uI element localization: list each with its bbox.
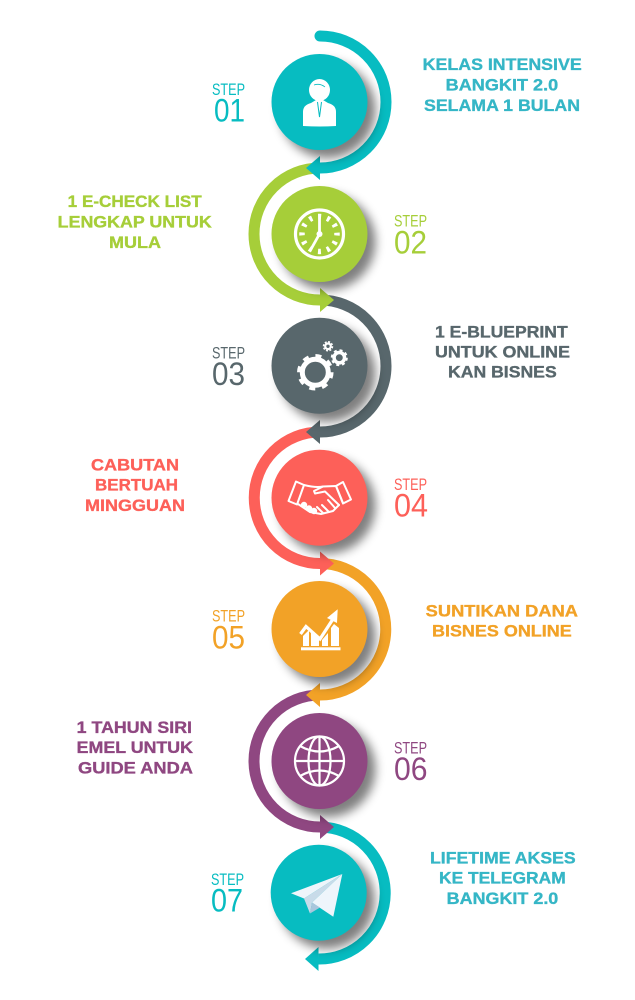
- text: step 3 description: 1 E-BLUEPRINT: [435, 323, 568, 341]
- step label 06: STEP: [394, 739, 427, 757]
- step label 04: 04: [394, 488, 428, 524]
- step label 02: STEP: [394, 213, 427, 231]
- step label 01: STEP: [212, 81, 245, 99]
- icon: globe: [295, 736, 344, 786]
- text: step 1 description: KELAS INTENSIVE: [423, 56, 582, 74]
- text: step 1 description: SELAMA 1 BULAN: [424, 97, 580, 115]
- text: step 2 description: 1 E-CHECK LIST: [68, 193, 202, 211]
- arrow: step 7: [305, 827, 385, 971]
- text: step 4 description: CABUTAN: [91, 457, 179, 475]
- curved arrows connecting the steps: [254, 36, 386, 971]
- text: step 2 description: MULA: [109, 234, 161, 252]
- step label 03: 03: [212, 356, 245, 392]
- text: step 4 description: BERTUAH: [95, 477, 178, 495]
- icon: gears: [299, 342, 347, 389]
- step label 02: 02: [394, 224, 427, 260]
- panel: step 3: [212, 318, 570, 422]
- panel: step 1: [212, 54, 582, 158]
- arrow: step 4: [254, 432, 334, 576]
- text: step 2 description: LENGKAP UNTUK: [58, 214, 212, 232]
- step label 07: 07: [211, 883, 243, 919]
- step label 06: 06: [394, 751, 428, 787]
- text: step 5 description: BISNES ONLINE: [432, 623, 572, 641]
- panel: step 2: [58, 186, 427, 290]
- step label 05: 05: [212, 619, 245, 655]
- text: step 6 description: 1 TAHUN SIRI: [77, 719, 192, 737]
- text: step 7 description: KE TELEGRAM: [439, 870, 566, 888]
- text: step 7 description: LIFETIME AKSES: [430, 850, 576, 868]
- text: step 4 description: [85, 457, 185, 515]
- text: step 7 description: [430, 850, 576, 908]
- step label 04: STEP: [394, 476, 427, 494]
- panel: step 4: [85, 450, 428, 554]
- text: step 2 description: [58, 193, 212, 252]
- text: step 6 description: [77, 719, 193, 778]
- icon: clock: [296, 210, 344, 258]
- icon: growth chart: [300, 609, 340, 650]
- step label 07: STEP: [211, 871, 244, 889]
- text: step 5 description: [426, 603, 578, 641]
- text: step 7 description: BANGKIT 2.0: [447, 890, 558, 908]
- arrow: step 1: [306, 36, 386, 180]
- icon: businessman: [303, 79, 336, 126]
- panel: step 7: [211, 845, 576, 949]
- text: step 3 description: [435, 323, 570, 381]
- arrow: step 6: [254, 695, 334, 839]
- text: step 3 description: UNTUK ONLINE: [435, 343, 570, 361]
- panel: step 5: [212, 581, 578, 685]
- text: step 6 description: GUIDE ANDA: [78, 760, 193, 778]
- icon: handshake: [288, 482, 351, 514]
- text: step 3 description: KAN BISNES: [448, 363, 557, 381]
- step label 03: STEP: [212, 344, 245, 362]
- text: step 1 description: BANGKIT 2.0: [446, 76, 558, 94]
- arrow: step 5: [306, 564, 386, 707]
- text: step 6 description: EMEL UNTUK: [77, 739, 193, 757]
- arrow: step 3: [306, 300, 386, 444]
- arrow: step 2: [254, 168, 334, 312]
- icon: paper plane: [291, 874, 342, 917]
- text: step 1 description: [423, 56, 582, 115]
- step label 05: STEP: [212, 608, 245, 626]
- panel: step 6: [77, 713, 427, 817]
- text: step 4 description: MINGGUAN: [85, 497, 185, 515]
- step label 01: 01: [214, 92, 245, 128]
- text: step 5 description: SUNTIKAN DANA: [426, 603, 578, 621]
- step label 01: [212, 81, 245, 128]
